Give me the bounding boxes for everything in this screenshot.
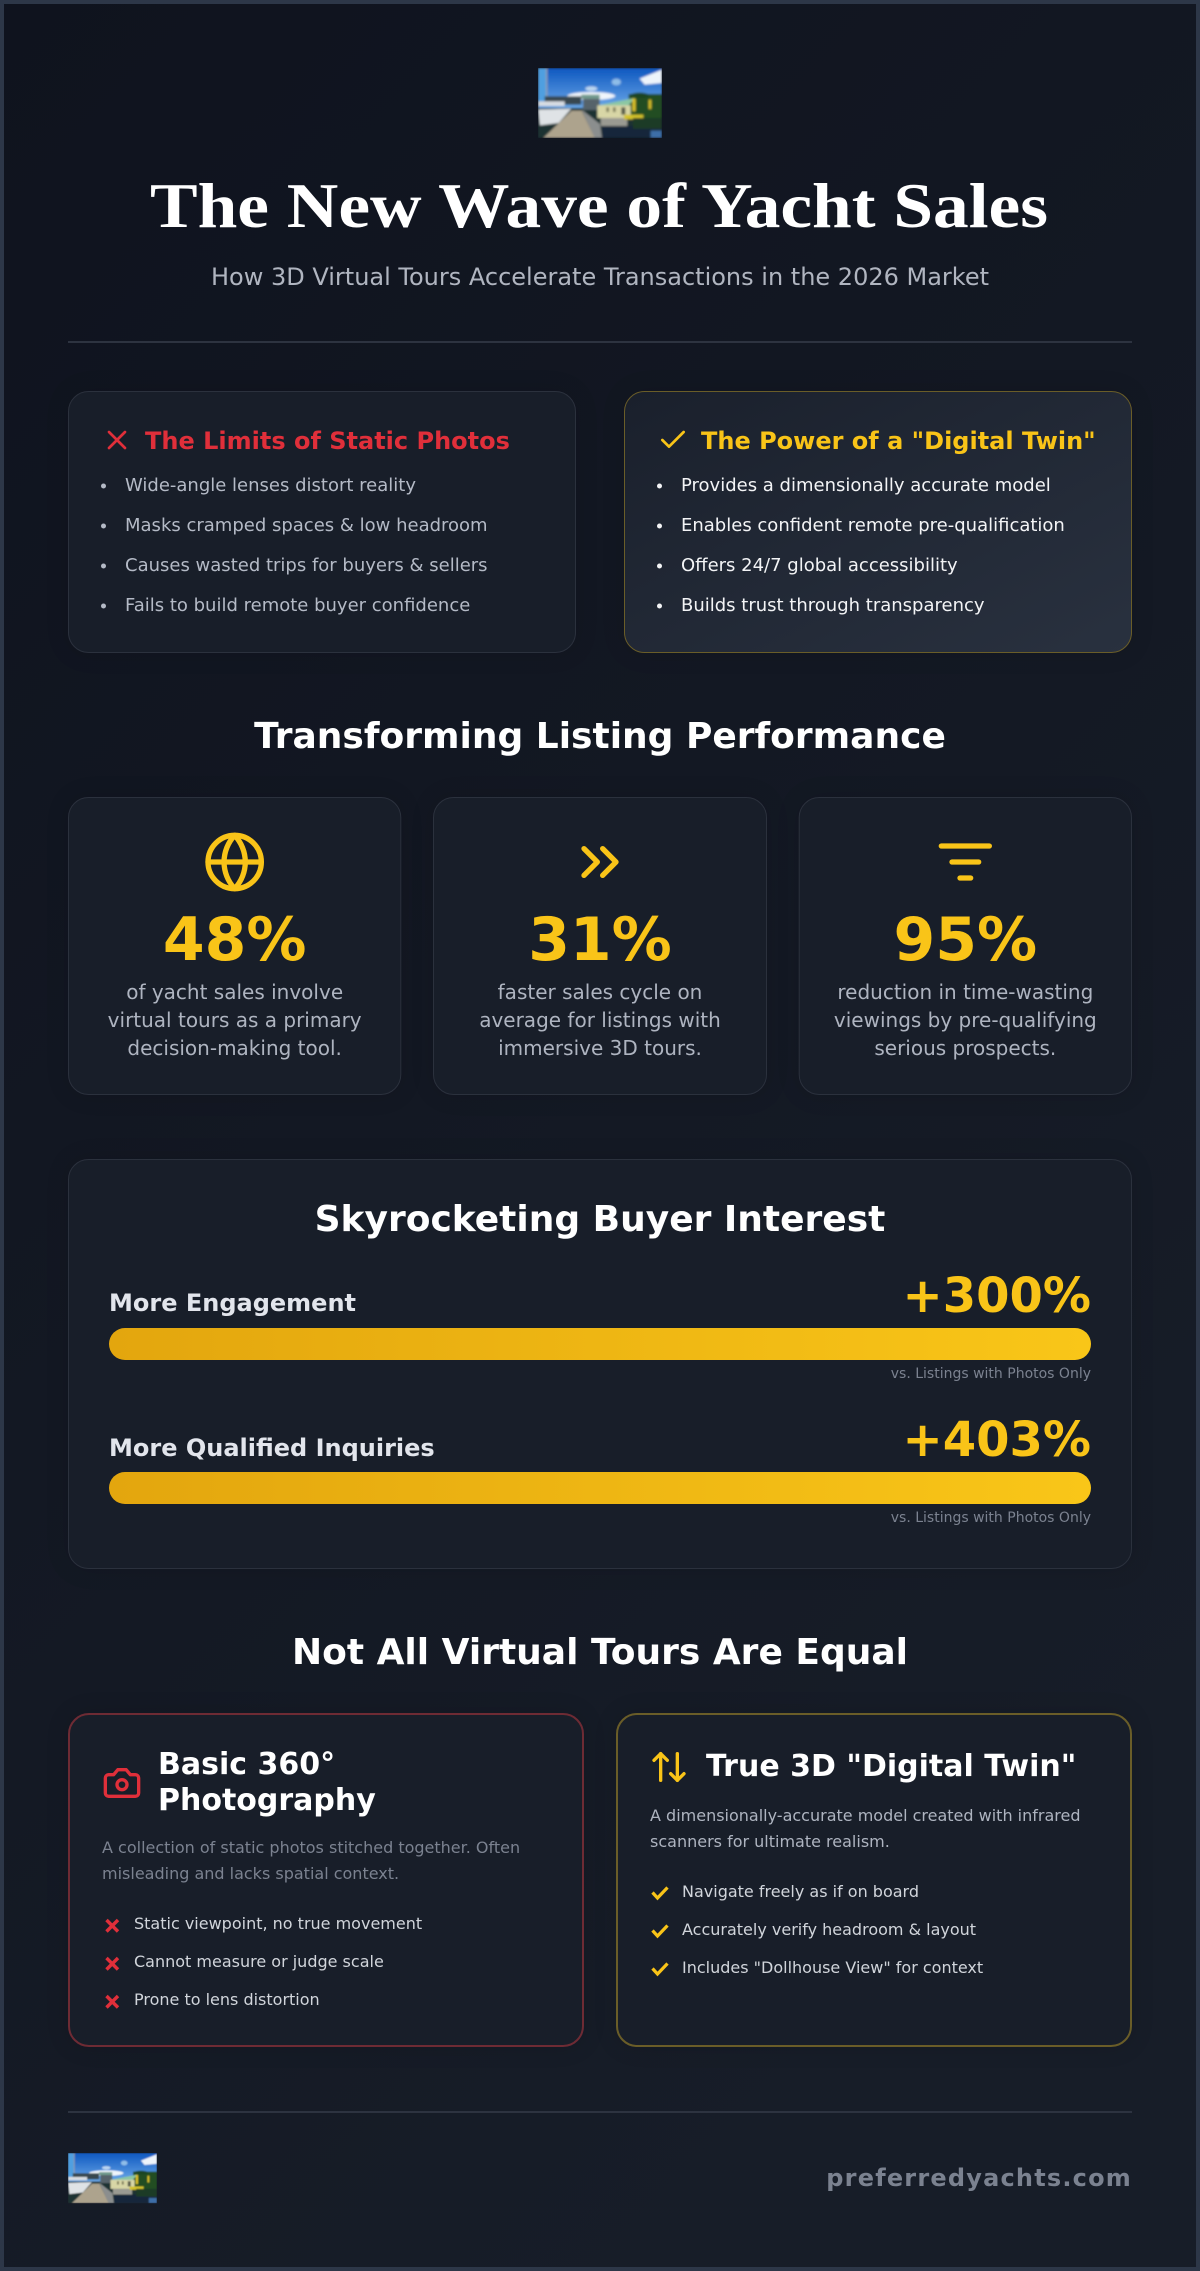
metric: more engagement [109,1268,1091,1382]
list: drawbacks: Cannot measure or judge scale [134,1952,384,1971]
list: benefits: Navigate freely as if on board [682,1882,919,1901]
bullet list: digital twin [657,475,1065,616]
bullet list: limits: Fails to build remote buyer confidence [125,595,470,616]
stat description [479,980,721,1060]
description: A dimensionally-accurate model created with infrared [650,1806,1080,1825]
panel: true 3d digital twin [616,1713,1132,2047]
stat card: 48% [68,797,401,1095]
heading: true 3d digital twin: True 3D "Digital Twin" [706,1749,1076,1784]
header logo photo [538,68,662,138]
footer logo photo [68,2153,157,2203]
heading: basic 360 photography: Photography [158,1783,376,1818]
heading: skyrocketing buyer interest: Skyrocketing Buyer Interest [315,1199,885,1240]
title: The New Wave of Yacht Sales [150,170,1048,241]
stat value: 31% [528,905,672,975]
metric: more engagement: More Engagement [109,1289,356,1317]
stat description: decision-making tool. [127,1036,342,1060]
stat description [834,980,1097,1060]
bullet list: digital twin: Provides a dimensionally accurate model [681,475,1051,496]
description [102,1838,520,1883]
metric: more qualified inquiries: +403% [902,1412,1091,1468]
stat description: immersive 3D tours. [498,1036,702,1060]
metric: more qualified inquiries [109,1412,1091,1526]
stat value: 95% [894,905,1037,975]
bar: inquiries [109,1472,1091,1504]
bar: engagement [109,1328,1091,1360]
note: inquiries comparison: vs. Listings with Photos Only [891,1510,1091,1526]
bullet list: digital twin: Offers 24/7 global accessibility [681,555,958,576]
stat description [108,980,362,1060]
list: benefits: Includes "Dollhouse View" for context [682,1958,983,1977]
stat card: 95% [799,797,1132,1095]
stat description: viewings by pre-qualifying [834,1008,1097,1032]
note: engagement comparison: vs. Listings with Photos Only [891,1366,1091,1382]
icon: camera [105,1770,139,1796]
icon: check mark [662,432,684,447]
stat description: average for listings with [479,1008,721,1032]
icon: up and down arrows [654,1754,684,1780]
heading: power of a digital twin: The Power of a "Digital Twin" [701,427,1096,455]
icon: globe [208,835,261,889]
list: drawbacks: Static viewpoint, no true movement [134,1914,422,1933]
panel: power of a digital twin [624,391,1132,653]
list: benefits: Accurately verify headroom & layout [682,1920,976,1939]
subtitle: How 3D Virtual Tours Accelerate Transactions in the 2026 Market [211,263,989,291]
stat description: serious prospects. [874,1036,1056,1060]
description [650,1806,1080,1851]
description: A collection of static photos stitched together. Often [102,1838,520,1857]
footer website: preferredyachts.com [826,2164,1132,2192]
description: misleading and lacks spatial context. [102,1864,399,1883]
stat description: faster sales cycle on [498,980,702,1004]
bullet list: limits: Causes wasted trips for buyers & sellers [125,555,488,576]
stat description: reduction in time-wasting [837,980,1093,1004]
list: drawbacks [106,1914,422,2009]
list: drawbacks: Prone to lens distortion [134,1990,320,2009]
stat card: 31% [433,797,767,1095]
icon: double chevrons [584,849,616,875]
bullet list: limits: Wide-angle lenses distort reality [125,475,416,496]
stat value: 48% [163,905,306,975]
description: scanners for ultimate realism. [650,1832,890,1851]
bullet list: digital twin: Enables confident remote pre-qualification [681,515,1065,536]
heading: basic 360 photography [158,1747,376,1818]
heading: transforming listing performance: Transforming Listing Performance [254,716,946,757]
heading: not all virtual tours are equal: Not All Virtual Tours Are Equal [292,1632,908,1673]
metric: more qualified inquiries: More Qualified Inquiries [109,1434,435,1462]
bullet list: limits: Masks cramped spaces & low headroom [125,515,488,536]
bullet list: limits [101,475,488,616]
stat description: of yacht sales involve [126,980,343,1004]
panel: skyrocketing buyer interest [68,1159,1132,1569]
heading: basic 360 photography: Basic 360° [158,1747,335,1782]
icon: funnel lines [941,846,989,878]
heading: limits of static photos: The Limits of Static Photos [145,427,510,455]
bullet list: digital twin: Builds trust through transparency [681,595,985,616]
icon: x mark [109,432,125,448]
panel: basic 360 photography [68,1713,584,2047]
metric: more engagement: +300% [902,1268,1091,1324]
list: benefits [652,1882,983,1977]
stat description: virtual tours as a primary [108,1008,362,1032]
panel: limits of static photos [68,391,576,653]
